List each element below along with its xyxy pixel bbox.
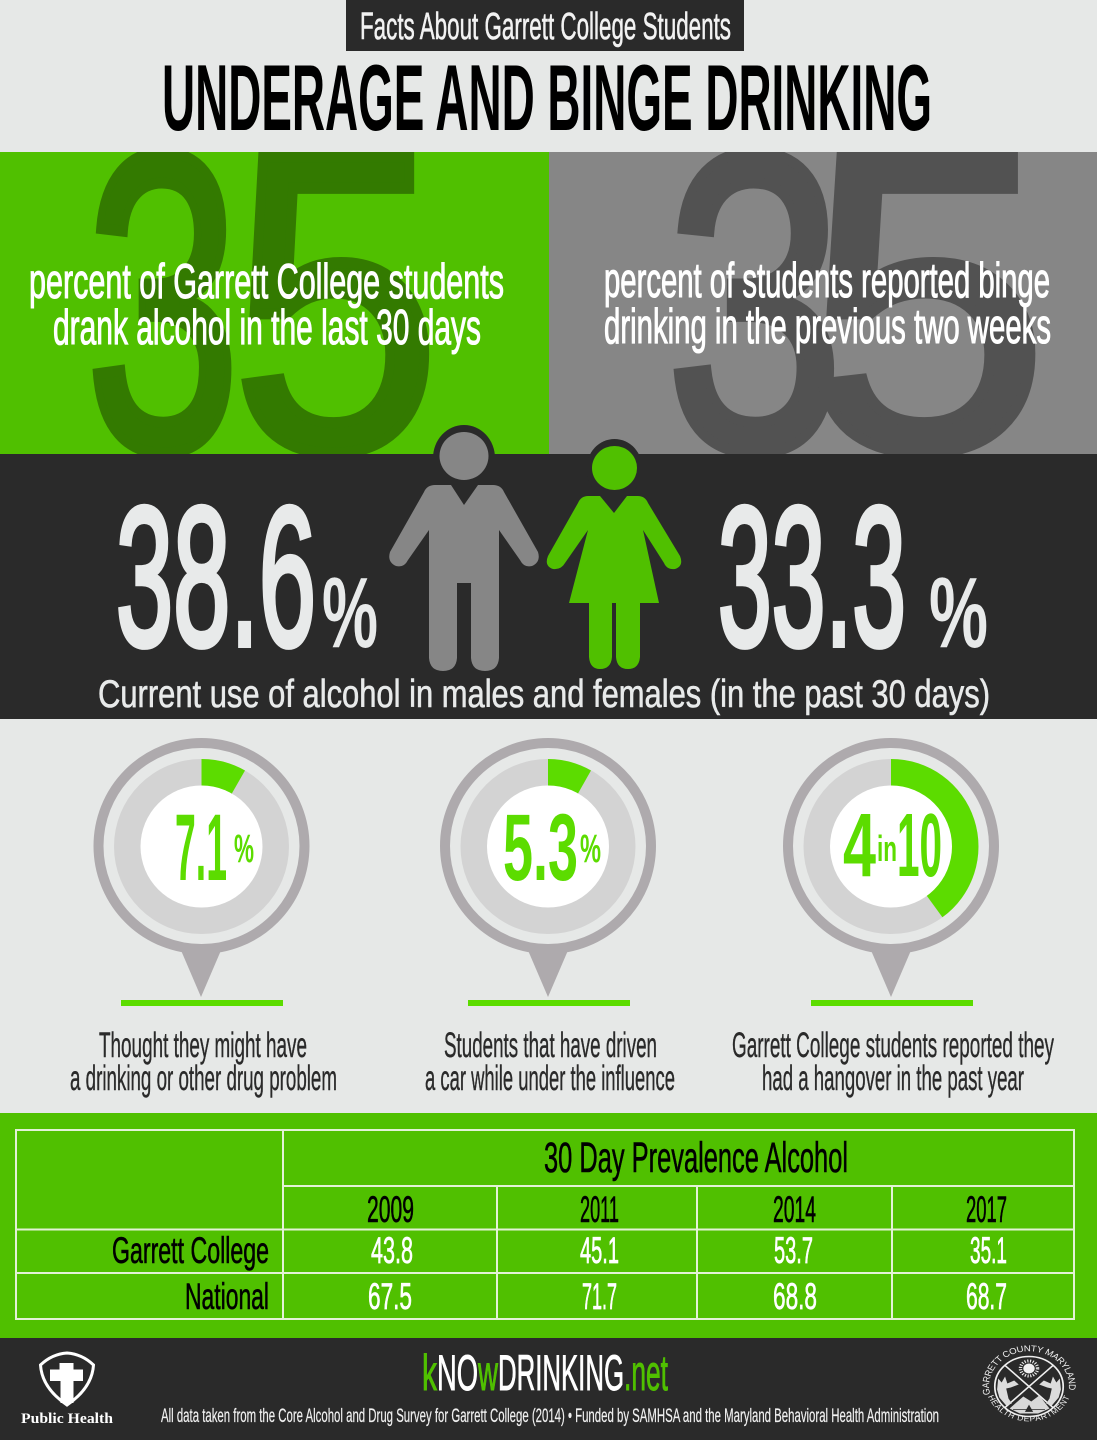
description: a car while under the influence [425, 1059, 675, 1098]
value: 5.3 [503, 795, 578, 901]
pin graphic [788, 743, 994, 997]
male percentage: 38.6 [116, 466, 316, 687]
Garrett College values: 45.1 [580, 1230, 619, 1271]
National values: 68.8 [773, 1276, 817, 1317]
panel: prevalence table [0, 1113, 1097, 1338]
panel: 35 percent drank alcohol: percent of Garrett College students [29, 255, 504, 309]
pin graphic [445, 743, 651, 997]
year headers: 2009 [367, 1189, 414, 1230]
value [843, 796, 942, 896]
website [422, 1345, 668, 1401]
panel: 35 percent drank alcohol [0, 152, 549, 454]
website: DRINKING [498, 1345, 624, 1401]
description [425, 1026, 675, 1098]
website: .net [624, 1345, 668, 1401]
value [175, 795, 254, 901]
National values: 71.7 [582, 1276, 617, 1317]
female percentage: 33.3 [718, 466, 906, 687]
icon: female figure [547, 439, 681, 669]
pin: 4 in 10: 10 [897, 796, 942, 896]
value: % [234, 827, 254, 871]
panel: 35 percent drank alcohol: drank alcohol in the last 30 days [53, 301, 481, 355]
description [732, 1026, 1054, 1098]
National values: 68.7 [966, 1276, 1007, 1317]
Garrett College values [371, 1230, 1007, 1271]
Garrett College values: 43.8 [371, 1230, 413, 1271]
panel: 35 percent binge drinking: 3 [666, 65, 844, 540]
Garrett College values: 35.1 [970, 1230, 1007, 1271]
public health label: Public Health [21, 1411, 114, 1427]
description: Students that have driven [444, 1026, 657, 1065]
icon: county health department seal [982, 1345, 1076, 1422]
header label [346, 0, 744, 51]
panel: prevalence table: 2017 [966, 1189, 1007, 1230]
icon: county health department seal: HEALTH DEPARTMENT [988, 1394, 1069, 1422]
National values: 67.5 [368, 1276, 412, 1317]
male percentage [116, 466, 378, 687]
value: % [580, 827, 601, 871]
row labels [112, 1230, 269, 1317]
description: a drinking or other drug problem [70, 1059, 337, 1098]
pin graphic [98, 743, 304, 997]
icon: county health department seal: GARRETT COUNTY MARYLAND [982, 1345, 1076, 1395]
footer [0, 1338, 1097, 1440]
year headers [367, 1189, 1007, 1230]
icon: male figure [389, 425, 539, 671]
icon: public health shield [40, 1353, 94, 1405]
Garrett College values: 53.7 [774, 1230, 813, 1271]
year headers: 2014 [773, 1189, 816, 1230]
value: 4 [843, 796, 876, 896]
description [70, 1026, 337, 1098]
header label: Facts About Garrett College Students [360, 6, 731, 48]
row labels: National [185, 1276, 269, 1317]
pin: 5.3 percent [425, 743, 675, 1098]
row labels: Garrett College [112, 1230, 269, 1271]
panel: current use by gender [0, 425, 1097, 719]
panel: 35 percent drank alcohol: 3 [86, 65, 240, 540]
value: 7.1 [175, 795, 227, 901]
panel: 35 percent binge drinking [549, 152, 1097, 454]
panel: 35 percent drank alcohol: 5 [232, 65, 440, 540]
male percentage: % [322, 557, 378, 669]
pin: 7.1 percent [70, 743, 337, 1098]
value: in [877, 828, 897, 869]
year headers: 2011 [580, 1189, 619, 1230]
National values [368, 1276, 1007, 1317]
description: Thought they might have [99, 1026, 307, 1065]
website: w [477, 1345, 498, 1401]
pin: 4 in 10 [732, 743, 1054, 1098]
table heading: 30 Day Prevalence Alcohol [544, 1134, 848, 1182]
website: NO [437, 1345, 478, 1401]
website: k [422, 1345, 438, 1401]
female percentage: % [929, 557, 988, 669]
panel: 35 percent binge drinking: 5 [806, 65, 1048, 540]
